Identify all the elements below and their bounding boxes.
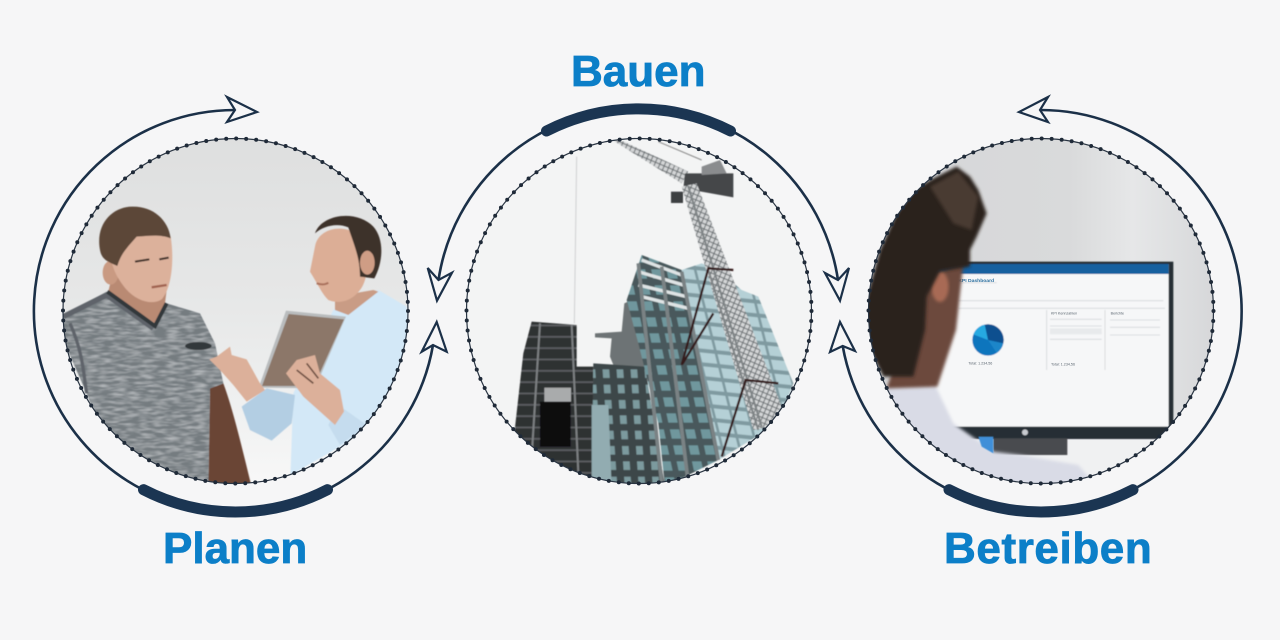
panel: Betreiben (830, 97, 1242, 573)
panel: Bauen (428, 47, 849, 487)
left dark tower (514, 322, 593, 487)
photo: two men with a tablet (60, 137, 413, 487)
glass tower: left face (627, 255, 718, 487)
heading: Planen: Planen (163, 524, 307, 573)
dashboard text: Berichte (1111, 312, 1124, 316)
dotted photo frame (868, 138, 1214, 484)
stepped core behind (594, 302, 648, 378)
hands (209, 347, 265, 402)
panel: Planen (34, 97, 447, 573)
crane jib (613, 141, 688, 183)
crane cabin (683, 173, 733, 197)
dotted photo frame (63, 138, 408, 484)
crane tower (682, 183, 782, 430)
dotted photo frame (466, 138, 812, 484)
man on the right: shirt (290, 290, 410, 487)
dashboard text (958, 278, 1124, 366)
photo: high-rise under construction with crane (514, 140, 794, 483)
dashboard text: Total: 1.234,56 (1051, 362, 1075, 366)
tablet (259, 311, 346, 388)
photo: person viewing dashboard on monitor (863, 137, 1217, 487)
circular arrow (34, 97, 447, 512)
dashboard text: KPI Dashboard (958, 278, 994, 284)
dashboard text: KPI Kennzahlen (1051, 312, 1077, 316)
man on the right: head (335, 290, 378, 315)
glass tower: right face (682, 263, 793, 460)
man on the left: neck and face (108, 278, 167, 324)
person: hair (863, 167, 987, 377)
mid building (592, 363, 665, 487)
circular arrow (428, 108, 849, 301)
heading: Bauen: Bauen (571, 47, 705, 96)
dashboard text: Total: 1.234,56 (968, 361, 992, 365)
dashboard pie chart (972, 324, 1004, 356)
person: shirt (888, 386, 1088, 483)
man on the left: shirt (62, 292, 223, 487)
crane braces (682, 268, 778, 457)
man on the left: arm (208, 383, 252, 487)
circular arrow (830, 97, 1242, 512)
monitor (930, 262, 1173, 455)
heading: Betreiben: Betreiben (944, 524, 1152, 573)
person: neck and ear (887, 263, 963, 388)
